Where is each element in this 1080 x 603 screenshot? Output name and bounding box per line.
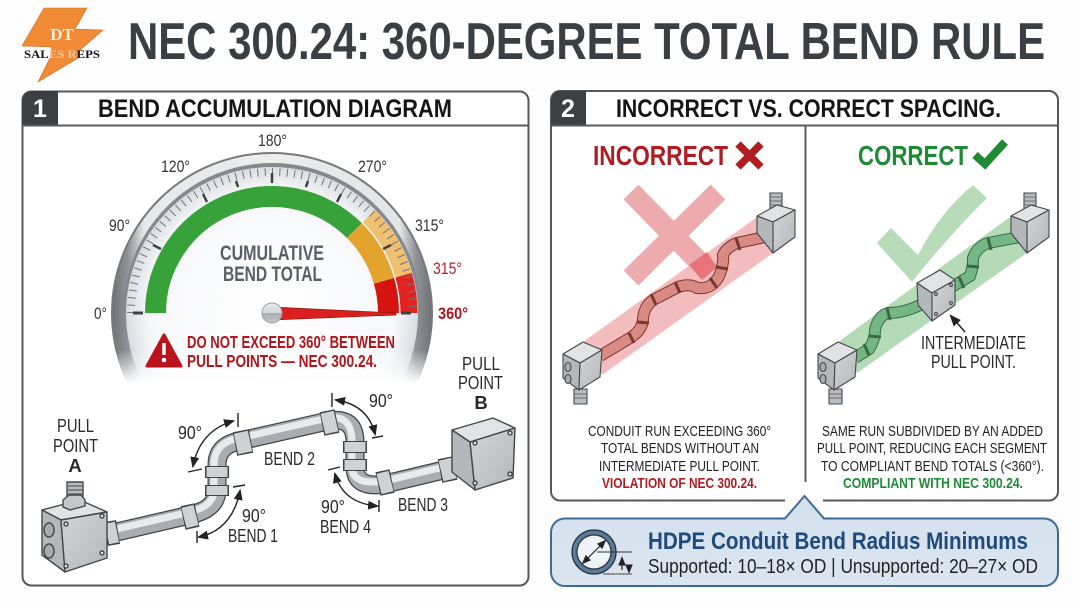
gauge scale labels: 270° [358,158,387,176]
gauge scale labels: 360° [438,305,468,323]
gauge major ticks [133,173,411,313]
logo: DT Sales Reps lightning bolt [22,8,103,82]
bezel fade [100,350,445,389]
gauge scale labels: 120° [161,158,190,176]
incorrect heading: INCORRECT [593,140,728,171]
gauge arc: red zone [384,281,388,313]
cross and band overlap [689,252,717,280]
gauge needle [272,307,396,320]
label: pull point A: A [68,455,82,476]
gauge minor ticks [131,172,413,313]
callout: HDPE conduit bend radius [551,496,1058,586]
gauge arc: green zone [156,196,354,313]
label: pull point B: B [474,392,488,413]
gauge warning band: amber [369,216,404,275]
label: pull point B: POINT [458,372,503,393]
large translucent cross [631,192,718,278]
bend labels: 90° [242,505,266,526]
conduit pipe [108,418,452,534]
panel 2 number badge [551,91,586,125]
conduit run, no intermediate pull point [600,237,765,356]
column: correct [817,140,1049,492]
bend labels: BEND 3 [398,494,448,515]
correct heading: CORRECT [858,140,968,171]
label: pull point A: PULL [57,415,94,436]
pipe couplings [106,421,455,534]
warning text: PULL POINTS — NEC 300.24. [187,351,377,371]
gauge scale labels: 0° [94,305,107,323]
warning text: DO NOT EXCEED 360° BETWEEN [187,332,395,352]
correct description: COMPLIANT WITH NEC 300.24. [843,475,1023,492]
gauge centre label: BEND TOTAL [223,263,322,286]
bend labels: 90° [369,390,393,411]
gauge scale labels: 90° [109,217,130,235]
panel 2 number badge: 2 [561,95,575,123]
gauge [94,134,468,381]
intermediate pull point label: INTERMEDIATE [921,332,1026,353]
gauge centre label: CUMULATIVE [220,242,324,265]
gauge warning band: red [404,275,409,313]
icon: red cross [738,144,761,167]
panel 2 heading: INCORRECT VS. CORRECT SPACING. [616,95,1001,123]
upper-right box [757,193,795,253]
translucent run band [583,217,773,375]
gauge scale labels [94,132,468,323]
junction box A [42,482,107,572]
lower-left box [563,342,602,404]
intermediate box [917,270,955,321]
translucent run band [838,217,1027,373]
bend angle arrows [188,393,383,543]
intermediate pull point label: PULL POINT. [931,351,1016,372]
gauge hub [262,303,282,323]
gauge scale labels: 315° [415,217,444,235]
panel 1 heading: BEND ACCUMULATION DIAGRAM [98,95,452,123]
panel 1 number badge: 1 [33,95,47,123]
incorrect description: VIOLATION OF NEC 300.24. [602,475,757,492]
panel 1 number badge [22,91,58,125]
label: pull point B: PULL [462,353,500,374]
gauge scale labels: 315° [433,260,462,278]
bend labels: BEND 4 [320,516,371,537]
label: pull point A: POINT [53,435,98,456]
junction box B [452,418,515,490]
gauge scale labels: 180° [258,132,287,150]
panel 1: bend accumulation diagram [22,91,529,586]
arrow to intermediate pull point [951,316,965,332]
gauge arc: amber zone [354,231,384,281]
conduit run diagram [42,353,515,572]
incorrect description: CONDUIT RUN EXCEEDING 360° [588,423,771,440]
large translucent check [877,185,987,282]
panel 2: incorrect vs correct spacing [551,91,1058,500]
bend labels: 90° [321,496,345,517]
incorrect description: INTERMEDIATE PULL POINT. [599,458,760,475]
bend labels: 90° [178,422,202,443]
callout title: HDPE Conduit Bend Radius Minimums [648,528,1028,555]
warning icon [147,335,181,366]
bend labels: BEND 1 [228,525,278,546]
icon: conduit cross-section [572,530,632,574]
incorrect description: TOTAL BENDS WITHOUT AN [601,440,759,457]
column: incorrect [563,140,795,492]
icon: green check [975,142,1005,164]
lower-left box [818,342,857,404]
conduit runs with intermediate pull point [855,237,1020,358]
logo: DT Sales Reps lightning bolt: SALES REPS [24,49,100,61]
bend labels: BEND 2 [264,448,315,469]
upper-right box [1011,193,1049,253]
bend labels [178,390,448,546]
logo: DT Sales Reps lightning bolt: DT [50,25,74,44]
